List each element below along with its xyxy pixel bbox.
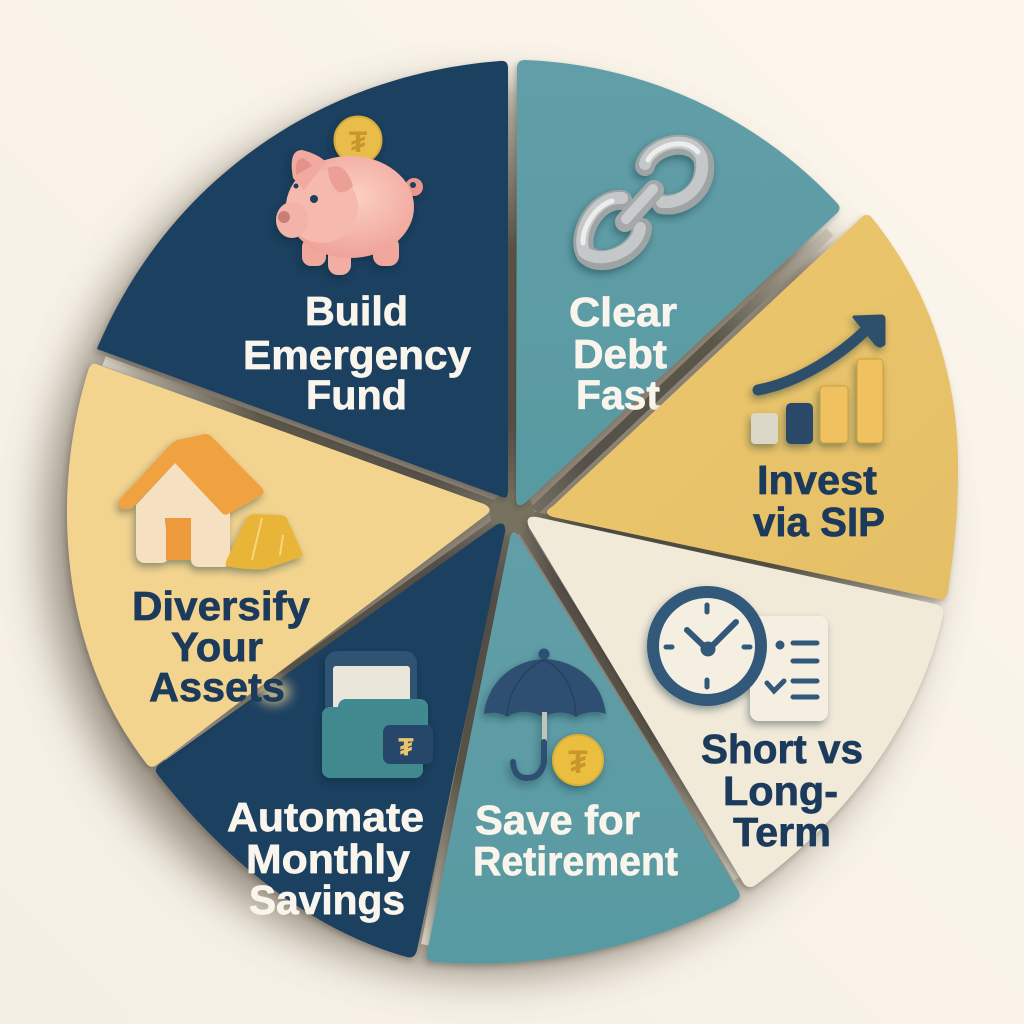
label [569, 289, 677, 418]
panel: short vs long-term [528, 517, 943, 887]
label: Build [305, 288, 408, 334]
icon: clock and checklist [653, 592, 828, 721]
label: Emergency [243, 332, 471, 378]
label: Your [171, 624, 263, 670]
panel: save for retirement [427, 532, 740, 964]
label: Diversify [132, 583, 310, 629]
label: Term [733, 809, 831, 855]
label [753, 457, 885, 545]
icon: umbrella and coin [484, 648, 606, 785]
glow behind label [258, 680, 290, 704]
label: Debt [573, 331, 667, 377]
icon: piggy bank: ₮ [349, 126, 367, 159]
pie chart [67, 60, 958, 964]
label: Assets [149, 664, 285, 710]
label [473, 797, 678, 884]
label [132, 583, 310, 710]
panel: automate monthly savings [156, 524, 505, 957]
label: Invest [757, 457, 877, 503]
label [243, 288, 471, 418]
label: Clear [569, 289, 677, 335]
panel: diversify your assets [67, 364, 490, 767]
label: via SIP [753, 499, 885, 545]
label: Automate [227, 794, 424, 840]
label [227, 794, 424, 923]
panel: invest via SIP [547, 215, 958, 599]
icon: chain [582, 143, 704, 260]
icon: wallet and phone [322, 651, 433, 778]
icon: piggy bank [276, 116, 423, 275]
label: Short vs [701, 726, 863, 772]
label: Long- [723, 768, 838, 814]
icon: house and gold [118, 434, 302, 569]
panel: clear debt fast [516, 60, 840, 505]
label: Fast [576, 372, 660, 418]
label: Fund [306, 372, 407, 418]
label: Savings [249, 877, 405, 923]
label: Retirement [473, 838, 678, 884]
label [701, 726, 863, 855]
panel: build emergency fund [97, 61, 508, 498]
drop shadow of pie [48, 92, 928, 972]
icon: wallet and phone: ₮ [399, 734, 414, 761]
label: Save for [475, 797, 640, 843]
icon: growth chart [751, 316, 884, 444]
label: Monthly [246, 836, 410, 882]
icon: umbrella and coin: ₮ [568, 744, 588, 780]
